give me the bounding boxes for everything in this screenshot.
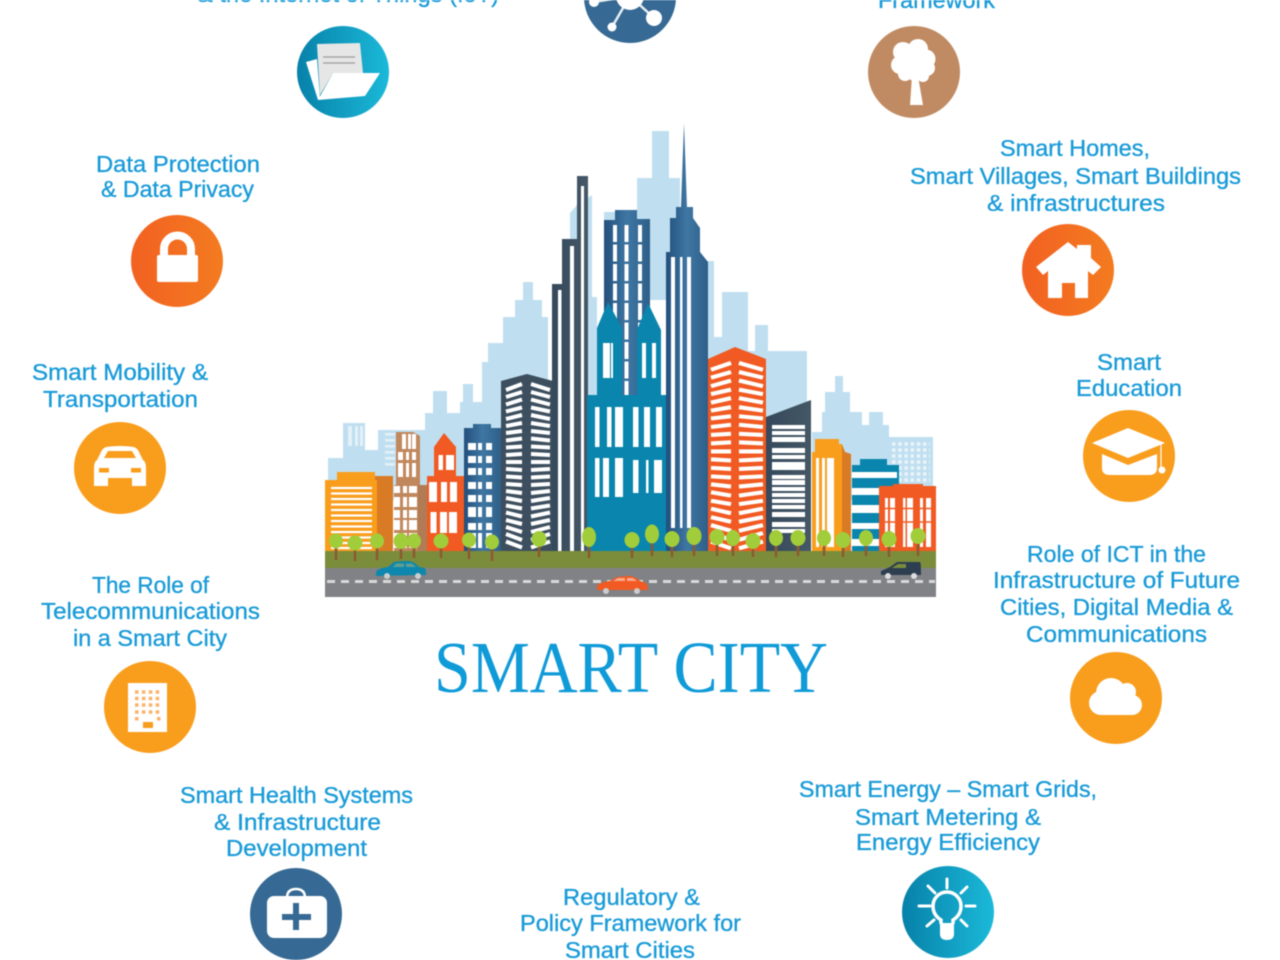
- label: & Infrastructure: [214, 809, 381, 835]
- teal striped building: [852, 459, 899, 551]
- label: Smart Energy – Smart Grids,: [799, 776, 1097, 802]
- background skyline: [328, 131, 933, 500]
- topic: regulatory and policy: [520, 884, 741, 960]
- blue window building: [464, 424, 501, 551]
- label: Development: [226, 835, 368, 861]
- label: in a Smart City: [73, 625, 227, 651]
- tan building: [394, 432, 428, 551]
- icon: light bulb: [902, 866, 994, 958]
- topic: smart energy: [799, 776, 1097, 958]
- road: [325, 568, 936, 597]
- teal cathedral tower: [587, 302, 666, 551]
- topic: ICT infrastructure: [993, 541, 1240, 744]
- icon: office building: [104, 661, 196, 753]
- topic: smart homes: [910, 135, 1241, 316]
- label: Role of ICT in the: [1027, 541, 1206, 567]
- blue car: [376, 561, 426, 579]
- label: [993, 541, 1240, 647]
- red car: [597, 576, 648, 594]
- red gabled building: [427, 433, 464, 551]
- blue tower behind cathedral: [604, 210, 650, 400]
- label: Smart: [1097, 349, 1162, 375]
- blue spire tower: [666, 123, 708, 551]
- icon: graduation cap: [1083, 410, 1175, 502]
- icon: car: [74, 422, 166, 514]
- topic: smart health: [180, 782, 413, 960]
- label: Data Protection: [96, 151, 260, 177]
- label: [799, 776, 1097, 855]
- red right building: [879, 484, 936, 551]
- label: Smart Mobility &: [32, 359, 208, 385]
- topic: Internet of Things: [197, 0, 499, 118]
- icon: cloud: [1070, 652, 1162, 744]
- icon: network nodes: [584, 0, 676, 43]
- green strip: [325, 551, 936, 568]
- icon: tree: [868, 26, 960, 118]
- city skyline illustration: [325, 123, 936, 597]
- label: Smart Homes,: [1000, 135, 1150, 161]
- dark slanted building: [766, 400, 811, 551]
- label: & infrastructures: [987, 190, 1165, 216]
- label: Transportation: [43, 386, 198, 412]
- label: Education: [1076, 375, 1182, 401]
- orange building left: [325, 472, 393, 551]
- label: Cities, Digital Media &: [1000, 594, 1233, 620]
- label: Smart Metering &: [855, 804, 1041, 830]
- icon: house: [1022, 224, 1114, 316]
- icon: open folder: [297, 26, 389, 118]
- topic: framework: [868, 0, 996, 118]
- topic: regulatory and policy: Regulatory &: [563, 884, 700, 910]
- topic: smart mobility: [32, 359, 208, 514]
- label: Smart Health Systems: [180, 782, 413, 808]
- label: [96, 151, 260, 202]
- topic: regulatory and policy: Policy Framework for: [520, 910, 741, 936]
- label: Infrastructure of Future: [993, 567, 1240, 593]
- label: Telecommunications: [41, 598, 260, 624]
- label: Communications: [1026, 621, 1207, 647]
- striped dark building: [501, 374, 553, 551]
- topic: smart education: [1076, 349, 1182, 502]
- topic: data protection: [96, 151, 260, 307]
- label: [910, 135, 1241, 216]
- orange striped tower: [708, 347, 766, 551]
- label: The Role of: [92, 572, 210, 598]
- label: & Data Privacy: [101, 176, 254, 202]
- label: [180, 782, 413, 861]
- label: [41, 572, 260, 651]
- label: Energy Efficiency: [856, 829, 1041, 855]
- topic: network: [584, 0, 676, 43]
- label: [1076, 349, 1182, 401]
- label: Smart Villages, Smart Buildings: [910, 163, 1241, 189]
- icon: medical kit: [250, 868, 342, 960]
- tall stepped tower: [552, 176, 588, 551]
- icon: padlock: [131, 215, 223, 307]
- dark van: [881, 562, 921, 579]
- topic: telecommunications: [41, 572, 260, 753]
- trees: [329, 524, 926, 561]
- dot windows: [892, 444, 930, 480]
- label: [32, 359, 208, 412]
- title: SMART CITY: SMART CITY: [434, 627, 828, 708]
- orange right building: [812, 439, 851, 551]
